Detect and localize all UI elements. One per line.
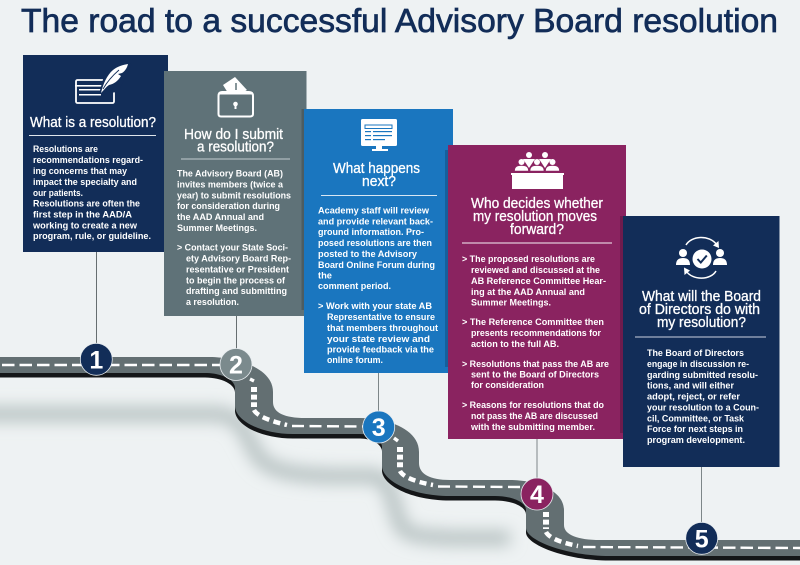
body text: impact the specialty and <box>33 177 137 188</box>
step marker 2 <box>220 348 252 380</box>
body text: engage in discussion re- <box>647 359 749 370</box>
body text: to begin the process of <box>186 276 286 286</box>
body text: your state review and <box>327 334 430 345</box>
body text: recommendations regard- <box>33 155 143 166</box>
body text: action to the full AB. <box>471 339 559 350</box>
body text: Force for next steps in <box>647 424 743 435</box>
icon: ballot box <box>218 77 253 116</box>
body text: a resolution. <box>186 297 239 308</box>
heading: my resolution? <box>657 315 746 331</box>
panel: what is a resolution <box>23 55 168 252</box>
heading: What is a resolution? <box>30 115 156 131</box>
body text: and provide relevant back- <box>318 216 433 228</box>
body text: tions, and will either <box>647 380 734 392</box>
body text: > Work with your state AB <box>318 301 432 312</box>
icon: letter and quill <box>75 60 132 103</box>
body text <box>177 168 291 308</box>
connector: step 3 <box>378 373 380 412</box>
heading: of Directors do with <box>639 302 760 318</box>
body text: your resolution to a Coun- <box>647 402 759 414</box>
panel: how do I submit a resolution <box>164 71 306 316</box>
body text: sent to the Board of Directors <box>471 370 599 380</box>
body text: online forum. <box>327 355 383 366</box>
step marker 4 <box>521 478 553 510</box>
body text: AB Reference Committee Hear- <box>471 276 606 287</box>
body text: Academy staff will review <box>318 206 430 216</box>
body text: that members throughout <box>327 323 439 334</box>
heading: Who decides whether <box>471 196 603 212</box>
step marker 3: 3 <box>372 414 386 442</box>
body text: our patients. <box>33 188 83 199</box>
body text: Representative to ensure <box>327 312 435 323</box>
body text: drafting and submitting <box>186 286 287 297</box>
body text: posted to the Advisory <box>318 249 418 260</box>
body text: resentative or President <box>186 264 290 276</box>
body text: invites members (twice a <box>177 180 284 190</box>
body text: comment period. <box>318 281 391 292</box>
body text <box>318 206 439 366</box>
step marker 1 <box>80 343 112 375</box>
heading: How do I submit <box>184 127 283 143</box>
heading: next? <box>362 174 396 190</box>
body text: > Resolutions that pass the AB are <box>462 359 609 370</box>
body text: presents recommendations for <box>471 328 601 339</box>
step marker 2: 2 <box>229 352 243 380</box>
step marker 3 <box>363 411 395 443</box>
body text: Summer Meetings. <box>471 298 551 308</box>
body text: Resolutions are often the <box>33 198 140 210</box>
body text: Board Online Forum during <box>318 260 435 271</box>
body text: garding submitted resolu- <box>647 370 758 381</box>
body text: for consideration during <box>177 201 280 212</box>
icon: computer monitor <box>361 119 397 151</box>
body text: > The proposed resolutions are <box>462 254 595 265</box>
step marker 1: 1 <box>89 346 103 374</box>
body text: cil, Committee, or Task <box>647 414 745 424</box>
connector: step 5 <box>700 467 702 524</box>
body text: ground information. Pro- <box>318 227 424 238</box>
body text: reviewed and discussed at the <box>471 265 600 276</box>
body text: first step in the AAD/A <box>33 210 132 220</box>
body text: ety Advisory Board Rep- <box>186 254 291 264</box>
body text <box>32 144 151 242</box>
icon: committee at table <box>511 152 564 189</box>
heading <box>471 196 603 238</box>
heading <box>184 127 283 156</box>
body text: ing concerns that may <box>33 166 128 177</box>
panel: board of directors <box>623 216 780 467</box>
step marker 5: 5 <box>695 526 709 554</box>
body text: with the submitting member. <box>470 422 595 433</box>
body text: program, rule, or guideline. <box>33 231 151 242</box>
icon: people, check mark and cycle arrows <box>676 237 727 278</box>
body text: > Contact your State Soci- <box>177 242 288 254</box>
step marker 4: 4 <box>530 481 544 509</box>
body text: working to create a new <box>32 220 138 232</box>
body text <box>462 254 609 433</box>
body text: ing at the AAD Annual and <box>471 287 585 298</box>
body text: posed resolutions are then <box>318 238 432 249</box>
body text: > Reasons for resolutions that do <box>462 400 604 411</box>
heading <box>333 161 420 190</box>
body text: year) to submit resolutions <box>177 190 291 202</box>
heading: forward? <box>510 222 564 238</box>
title: The road to a successful Advisory Board resolution <box>21 2 778 39</box>
body text: not pass the AB are discussed <box>471 411 598 422</box>
connector: step 2 <box>236 316 238 350</box>
road shadow <box>0 414 510 538</box>
panel: who decides <box>448 145 626 439</box>
body text: Summer Meetings. <box>177 223 257 234</box>
connector: step 4 <box>536 439 538 480</box>
body text: provide feedback via the <box>327 344 434 356</box>
body text: the AAD Annual and <box>177 212 264 223</box>
heading: a resolution? <box>197 140 274 156</box>
body text: The Board of Directors <box>647 348 744 359</box>
body text: for consideration <box>471 380 544 391</box>
body text: the <box>318 270 332 282</box>
body text: adopt, reject, or refer <box>647 392 740 402</box>
body text: Resolutions are <box>33 144 98 155</box>
body text: > The Reference Committee then <box>462 317 604 328</box>
road <box>0 357 800 560</box>
heading <box>639 289 761 331</box>
connector: step 1 <box>96 252 98 345</box>
road centre dashes <box>2 365 800 548</box>
heading: What will the Board <box>642 289 761 305</box>
heading: What happens <box>333 161 420 177</box>
heading: my resolution moves <box>473 209 597 225</box>
body text: The Advisory Board (AB) <box>177 168 283 180</box>
step marker 5 <box>686 522 718 554</box>
body text: program development. <box>647 435 745 446</box>
body text <box>647 348 759 446</box>
panel: what happens next <box>304 109 453 373</box>
